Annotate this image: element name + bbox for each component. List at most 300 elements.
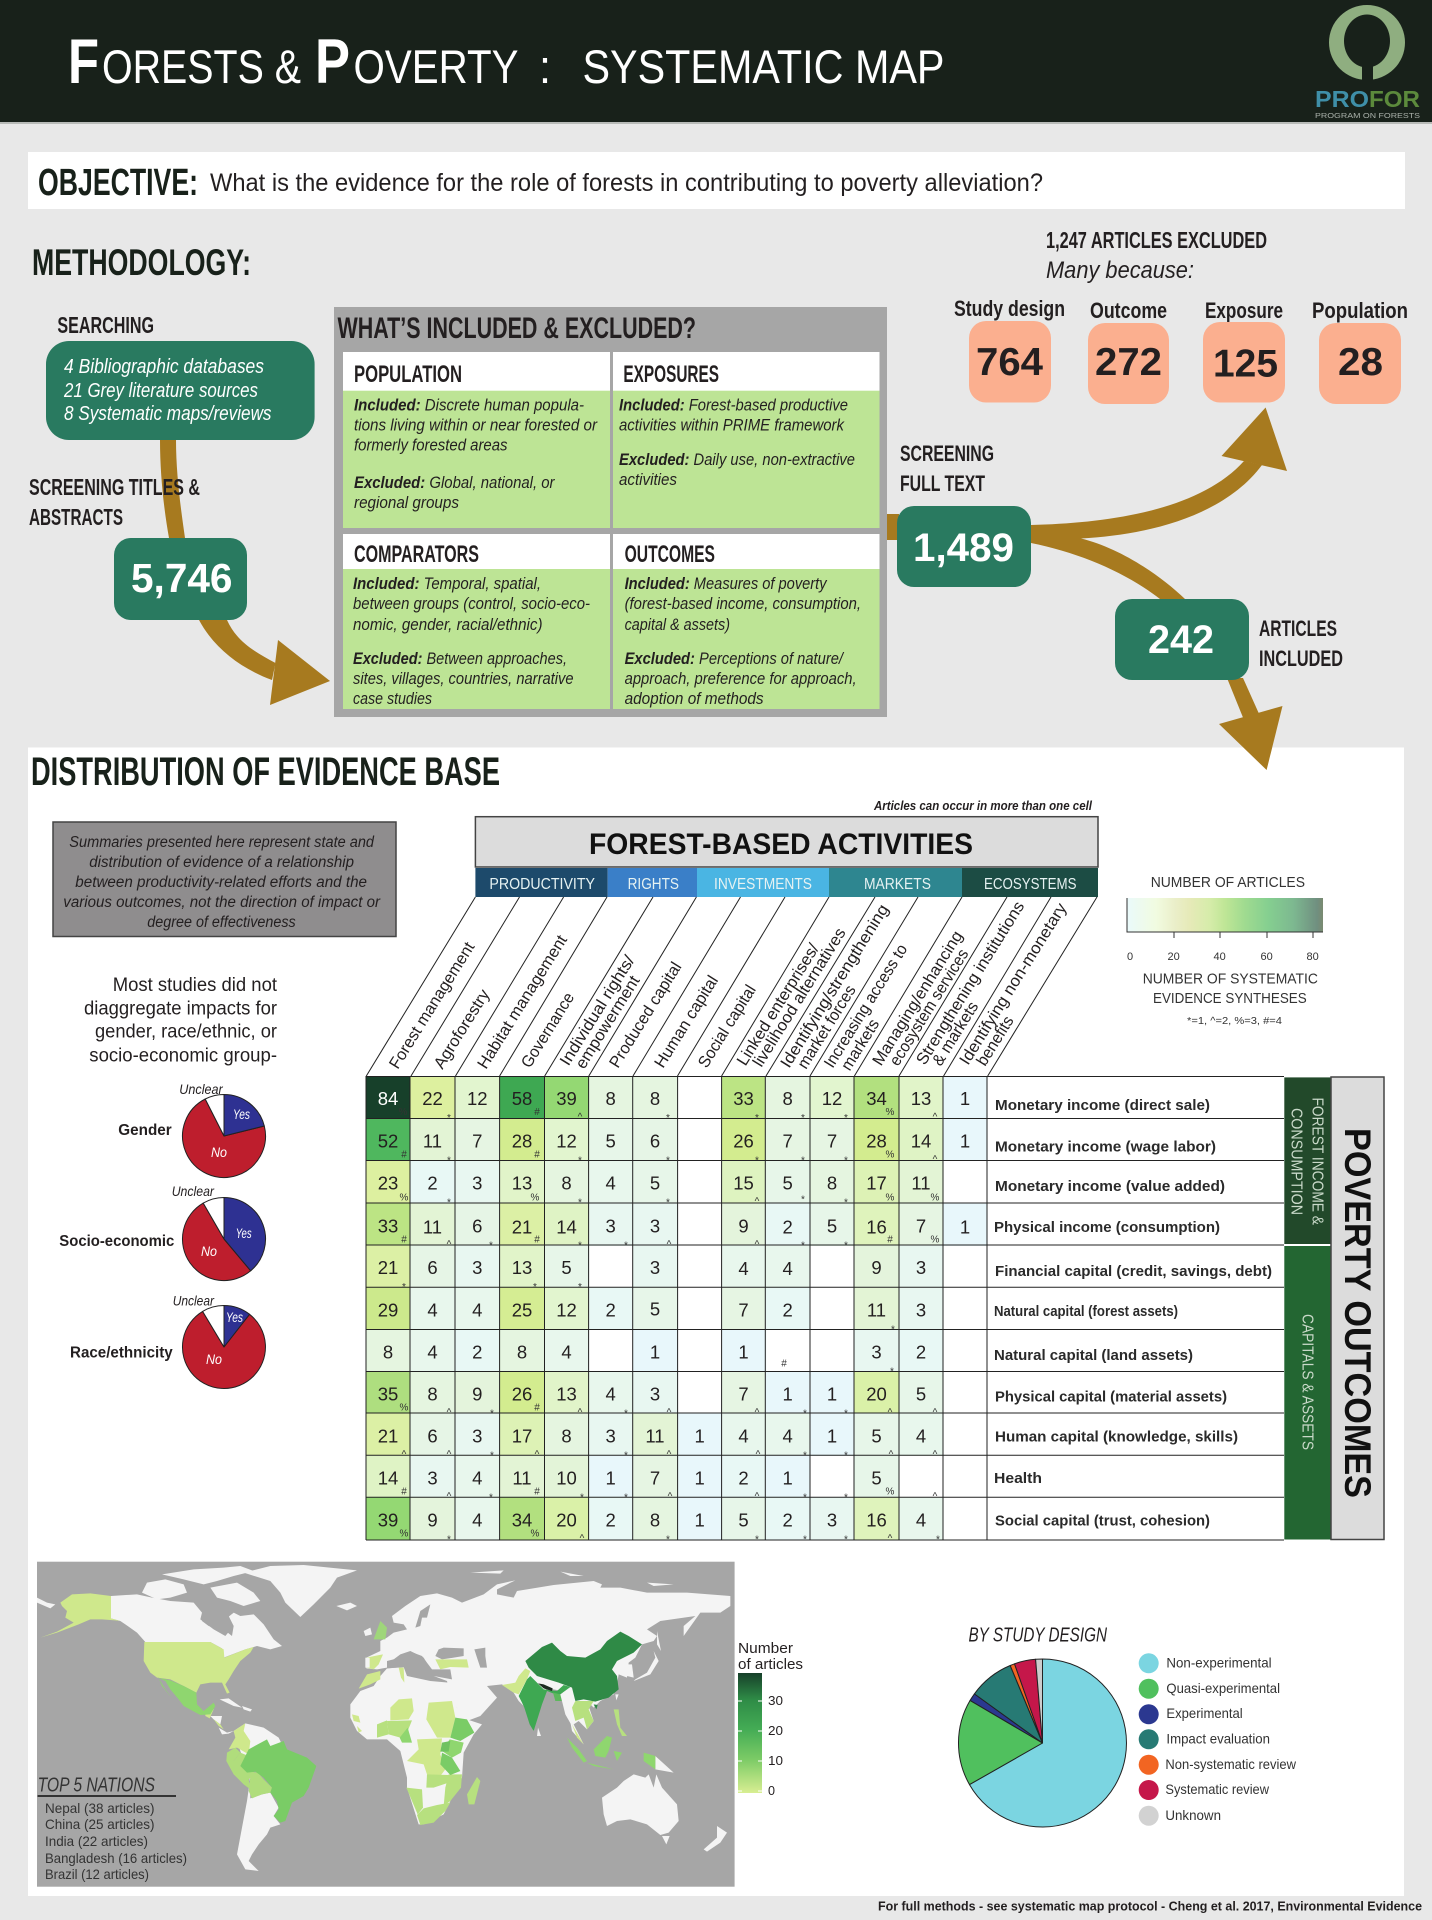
heatmap numbers: row 3: 5 <box>650 1172 660 1193</box>
legend: study design: Systematic review <box>1165 1781 1270 1797</box>
heatmap numbers: row 3: 8 <box>561 1172 572 1193</box>
objective bar: What is the evidence for the role of forests in contributing to poverty alleviation? <box>210 169 1043 197</box>
band: rights <box>608 868 697 897</box>
objective bar: OBJECTIVE: <box>38 162 198 204</box>
heatmap numbers: row 4: ^ <box>755 1239 760 1250</box>
column labels: livelihood alternatives <box>750 925 850 1070</box>
legend: number of articles: 80 <box>1306 951 1319 963</box>
heatmap numbers: row 1: # <box>534 1107 540 1118</box>
heatmap numbers: row 7: * <box>890 1366 894 1377</box>
heatmap numbers: row 8 <box>378 1383 938 1419</box>
pie chart: socio-economic <box>59 1183 266 1281</box>
heatmap numbers: row 9: ^ <box>889 1449 894 1460</box>
heatmap numbers: row 1: 84 <box>378 1088 398 1109</box>
heatmap numbers: row 3: 2 <box>427 1172 438 1193</box>
heatmap numbers: row 9: ^ <box>756 1449 761 1460</box>
arrow: branches from full text screening <box>887 408 1287 770</box>
heatmap numbers: row 10: * <box>803 1492 807 1503</box>
heatmap numbers: row 10: 10 <box>556 1467 577 1488</box>
heatmap numbers: row 6: 3 <box>916 1299 926 1320</box>
heatmap numbers: row 10: ^ <box>933 1491 938 1502</box>
heatmap numbers: row 1: 22 <box>422 1088 443 1109</box>
heatmap numbers: row 11: 34 <box>512 1509 532 1530</box>
heatmap numbers: row 7: 1 <box>738 1341 749 1362</box>
heatmap numbers: row 11: 1 <box>694 1509 705 1530</box>
legend: map number of articles: 20 <box>768 1723 783 1738</box>
cell: outcomes: adoption of methods <box>625 689 764 708</box>
callout: summaries note: various outcomes, not the direction of impact or <box>63 894 381 911</box>
title: OVERTY <box>354 40 518 93</box>
exclusion: study design: 764 <box>976 341 1043 384</box>
heatmap numbers: row 10: 11 <box>512 1467 532 1488</box>
heatmap numbers: row 8: 3 <box>650 1383 660 1404</box>
heatmap numbers: row 1: 39 <box>556 1088 577 1109</box>
column labels: & markets <box>929 999 982 1069</box>
count box: 242 <box>1115 599 1249 680</box>
heatmap numbers: row 11: 20 <box>556 1509 577 1530</box>
heatmap numbers: row 11: 3 <box>827 1509 837 1530</box>
heatmap numbers: row 8: 35 <box>378 1383 398 1404</box>
legend: study design: Unknown <box>1165 1807 1221 1823</box>
column labels: Habitat management <box>474 932 571 1072</box>
heatmap numbers: row 9: ^ <box>535 1449 540 1460</box>
legend: number of articles: NUMBER OF ARTICLES <box>1151 874 1305 891</box>
heatmap numbers: row 9: 1 <box>827 1425 837 1446</box>
heatmap numbers: row 10 <box>378 1467 938 1503</box>
heatmap numbers: row 10: 1 <box>782 1467 793 1488</box>
title: P <box>315 27 350 97</box>
heatmap numbers: row 8: ^ <box>447 1407 452 1418</box>
heatmap numbers: row 8: * <box>490 1408 494 1419</box>
heatmap numbers: row 2: 14 <box>911 1130 931 1151</box>
title <box>68 27 944 97</box>
pie chart: socio-economic: Socio-economic <box>59 1233 174 1250</box>
heatmap numbers: row 10: % <box>886 1486 895 1497</box>
heatmap numbers: row 5: * <box>578 1282 582 1293</box>
heatmap numbers: row 6: 11 <box>867 1299 886 1320</box>
heatmap numbers: row 8: 20 <box>866 1383 887 1404</box>
heading box: forest-based activities: FOREST-BASED ACTIVITIES <box>589 828 973 861</box>
heatmap numbers: row 11: * <box>844 1534 848 1545</box>
heatmap numbers: row 9: 1 <box>694 1425 705 1446</box>
heatmap numbers: row 9: 17 <box>512 1425 532 1446</box>
pie chart: race/ethnicity: Yes <box>226 1309 243 1325</box>
heading box: poverty outcomes <box>1331 1077 1384 1540</box>
row labels: poverty outcomes: Monetary income (direct sale) <box>995 1097 1210 1114</box>
panel: distribution of evidence base <box>28 748 1404 1896</box>
cell: exposures: Included: Forest-based productive <box>619 396 848 415</box>
count box: 5,746: 5,746 <box>131 555 232 601</box>
heatmap numbers: row 8: ^ <box>888 1407 893 1418</box>
heatmap numbers: row 1: 8 <box>605 1088 616 1109</box>
heatmap numbers: row 9: ^ <box>667 1449 672 1460</box>
heatmap numbers: row 11: 4 <box>472 1509 482 1530</box>
exclusion: study design <box>954 296 1065 402</box>
list: top 5 nations: India (22 articles) <box>45 1833 148 1849</box>
heatmap numbers: row 4: * <box>489 1240 493 1251</box>
heatmap numbers: row 8: * <box>844 1408 848 1419</box>
heatmap numbers: row 2: # <box>401 1149 407 1160</box>
cell: exposures: activities within PRIME framework <box>619 416 845 435</box>
heatmap numbers: row 5: * <box>402 1282 406 1293</box>
heatmap numbers: row 9: 11 <box>645 1425 665 1446</box>
heatmap numbers: row 2: 11 <box>423 1130 442 1151</box>
heatmap numbers: row 4: # <box>401 1234 407 1245</box>
row labels: poverty outcomes: Physical capital (material assets) <box>995 1388 1227 1406</box>
heatmap numbers: row 4: ^ <box>667 1239 672 1250</box>
heatmap numbers: row 4: * <box>844 1240 848 1251</box>
heatmap numbers: row 8: 13 <box>556 1383 577 1404</box>
heatmap numbers: row 10: 1 <box>694 1467 705 1488</box>
heatmap numbers: row 6: 12 <box>556 1299 577 1320</box>
legend: number of articles: 20 <box>1168 951 1180 963</box>
cell: comparators: COMPARATORS <box>354 541 479 568</box>
articles included label <box>1259 616 1343 671</box>
heatmap numbers: row 6: 2 <box>782 1299 793 1320</box>
heatmap numbers: row 1: % <box>399 1107 408 1118</box>
screening titles label: ABSTRACTS <box>29 504 123 530</box>
exclusion: outcome: 272 <box>1095 341 1162 384</box>
heatmap numbers: row 2: 7 <box>472 1130 482 1151</box>
list: top 5 nations <box>38 1775 187 1882</box>
heatmap numbers: row 2 <box>378 1130 970 1166</box>
heatmap numbers: row 3: 13 <box>512 1172 532 1193</box>
heatmap numbers: row 4: 3 <box>650 1215 660 1236</box>
cell: population: regional groups <box>354 493 459 512</box>
pie chart: socio-economic: No <box>201 1243 217 1259</box>
callout: summaries note: Summaries presented here represent state and <box>69 834 375 851</box>
screening full text label: FULL TEXT <box>900 471 985 496</box>
heatmap numbers: row 9: * <box>803 1450 807 1461</box>
heatmap numbers: row 2: 7 <box>827 1130 837 1151</box>
heatmap numbers: row 7: 2 <box>472 1341 482 1362</box>
band: markets <box>829 868 962 897</box>
heatmap numbers: row 8: 8 <box>427 1383 438 1404</box>
column labels: Individual rights/ <box>557 952 639 1069</box>
column labels: benefits <box>973 1013 1018 1069</box>
cell: comparators: nomic, gender, racial/ethnic) <box>353 615 542 634</box>
heatmap numbers: row 4: 6 <box>472 1215 482 1236</box>
legend: number of articles: 0 <box>1127 951 1133 963</box>
cell: outcomes: (forest-based income, consumption, <box>625 594 861 613</box>
cell: population: POPULATION <box>354 361 462 388</box>
heatmap numbers: row 9: 5 <box>871 1425 882 1446</box>
heatmap numbers: row 6: 25 <box>512 1299 532 1320</box>
heatmap numbers: row 1: 12 <box>467 1088 488 1109</box>
heatmap numbers: row 4: 11 <box>423 1216 442 1237</box>
row labels: poverty outcomes: Health <box>994 1470 1042 1487</box>
heatmap numbers: row 2: * <box>447 1155 451 1166</box>
diagonal column dividers <box>366 897 1097 1076</box>
heatmap numbers: row 1 <box>378 1088 970 1124</box>
arrow: screening to inclusion criteria <box>199 620 330 705</box>
heatmap numbers: row 2: 26 <box>733 1130 754 1151</box>
heatmap numbers: row 8: * <box>624 1408 628 1419</box>
callout: summaries note: between productivity-related efforts and the <box>75 874 367 891</box>
exclusion: exposure: Exposure <box>1205 298 1283 323</box>
column labels: Governance <box>518 989 578 1071</box>
list: top 5 nations: Nepal (38 articles) <box>45 1800 154 1816</box>
cell: population: Included: Discrete human popula- <box>354 396 584 415</box>
exclusion: outcome <box>1088 298 1169 404</box>
legend: study design: Non-experimental <box>1166 1655 1272 1671</box>
cell: exposures <box>613 352 880 528</box>
heatmap numbers: row 4: * <box>801 1240 805 1251</box>
heatmap numbers: row 8: 4 <box>605 1383 616 1404</box>
list: top 5 nations: China (25 articles) <box>45 1816 154 1832</box>
pie chart: gender: Yes <box>233 1106 250 1122</box>
heatmap numbers: row 9: * <box>490 1450 494 1461</box>
heatmap numbers: row 2: * <box>844 1155 848 1166</box>
legend: map number of articles: 30 <box>768 1693 783 1708</box>
legend: map number of articles: Number <box>738 1640 793 1657</box>
heatmap numbers: row 10: # <box>534 1486 540 1497</box>
exclusion: study design: Study design <box>954 296 1065 321</box>
world map <box>37 1562 735 1887</box>
cell: outcomes: OUTCOMES <box>625 541 715 568</box>
callout: summaries note: distribution of evidence of a relationship <box>89 854 354 871</box>
callout: summaries note <box>53 822 396 936</box>
band: rights: RIGHTS <box>628 876 679 893</box>
band: productivity: PRODUCTIVITY <box>489 876 595 893</box>
band: forest income and consumption <box>1284 1077 1331 1244</box>
heatmap numbers: row 4: 16 <box>866 1216 887 1237</box>
legend: number of articles: EVIDENCE SYNTHESES <box>1153 990 1307 1007</box>
icon: PROFOR logo <box>1315 5 1420 120</box>
legend: number of articles: 40 <box>1214 951 1226 963</box>
band: investments: INVESTMENTS <box>714 876 812 893</box>
cell: comparators: Excluded: Between approaches, <box>353 649 567 668</box>
heatmap numbers: row 1: * <box>447 1113 451 1124</box>
legend: number of articles: *=1, ^=2, %=3, #=4 <box>1187 1016 1282 1027</box>
band: forest income and consumption: CONSUMPTION <box>1288 1108 1305 1215</box>
heatmap numbers: row 5: 21 <box>378 1257 398 1278</box>
heatmap numbers: row 1: 1 <box>960 1088 970 1109</box>
cell: population: formerly forested areas <box>354 436 508 455</box>
heatmap numbers: row 5: 4 <box>782 1258 793 1279</box>
legend: number of articles: NUMBER OF SYSTEMATIC <box>1143 971 1318 988</box>
heatmap numbers: row 5: 9 <box>871 1257 882 1278</box>
heatmap numbers: row 3: 4 <box>605 1172 616 1193</box>
heatmap numbers: row 8: ^ <box>933 1407 938 1418</box>
heatmap numbers: row 1: 13 <box>911 1088 931 1109</box>
heatmap numbers: row 9: ^ <box>402 1449 407 1460</box>
heatmap numbers: row 7: 2 <box>916 1341 926 1362</box>
screening titles label: SCREENING TITLES & <box>29 474 200 500</box>
heatmap numbers: row 10: * <box>844 1492 848 1503</box>
heatmap numbers: row 8: 1 <box>827 1383 837 1404</box>
exclusion: population: 28 <box>1338 341 1383 384</box>
heatmap numbers: row 10: 2 <box>738 1467 749 1488</box>
heatmap numbers: row 11: * <box>803 1534 807 1545</box>
heatmap numbers: row 1: 58 <box>512 1088 532 1109</box>
heatmap numbers: row 5: 13 <box>512 1257 532 1278</box>
count box: 1,489: 1,489 <box>913 526 1014 570</box>
heatmap numbers: row 3: 5 <box>782 1172 793 1193</box>
heatmap numbers: row 4: % <box>931 1234 940 1245</box>
heatmap numbers: row 3: 15 <box>733 1172 754 1193</box>
column labels: Strengthening institutions <box>913 898 1028 1068</box>
cell: exposures: EXPOSURES <box>623 361 719 388</box>
column labels: Identifying/strengthening <box>777 901 893 1071</box>
callout: summaries note: degree of effectiveness <box>147 914 296 931</box>
legend: map number of articles <box>738 1640 803 1798</box>
heatmap numbers: row 11: ^ <box>580 1533 585 1544</box>
searching box: 21 Grey literature sources <box>63 380 258 402</box>
heatmap numbers: row 3: * <box>844 1197 848 1208</box>
cell: outcomes: capital & assets) <box>625 615 730 634</box>
heatmap numbers: row 3: 11 <box>911 1172 931 1193</box>
heatmap numbers: row 2: * <box>801 1155 805 1166</box>
heatmap numbers: row 2: 6 <box>650 1130 660 1151</box>
heatmap numbers: row 2: 52 <box>378 1130 398 1151</box>
pie chart: gender: No <box>211 1144 227 1160</box>
heatmap numbers: row 9 <box>378 1425 938 1461</box>
heatmap numbers: row 1: 34 <box>866 1088 887 1109</box>
pie chart: socio-economic: Yes <box>236 1225 252 1241</box>
heatmap numbers: row 1: 8 <box>650 1088 660 1109</box>
heatmap numbers: row 10: 14 <box>378 1467 398 1488</box>
searching box: 4 Bibliographic databases <box>64 356 264 378</box>
heatmap numbers: row 4: 33 <box>378 1215 398 1236</box>
pie chart: race/ethnicity: Race/ethnicity <box>70 1344 173 1362</box>
heading box: forest-based activities <box>475 817 1098 867</box>
column labels: Social capital <box>695 982 760 1071</box>
exclusion: population <box>1312 298 1408 404</box>
legend: number of articles <box>1127 874 1323 1027</box>
heatmap numbers: row 11 <box>378 1509 940 1545</box>
list: top 5 nations: Bangladesh (16 articles) <box>45 1850 187 1866</box>
heatmap numbers: row 11: 2 <box>605 1509 616 1530</box>
column labels: Produced capital <box>606 959 685 1071</box>
heatmap numbers: row 11: * <box>755 1534 759 1545</box>
exclusion: population: Population <box>1312 298 1408 323</box>
heatmap numbers: row 1: 8 <box>782 1088 793 1109</box>
text: disaggregation note <box>84 975 278 1067</box>
heatmap numbers: row 3: 8 <box>827 1172 837 1193</box>
heatmap numbers: row 9: ^ <box>447 1449 452 1460</box>
heatmap numbers: row 8: ^ <box>755 1407 760 1418</box>
heatmap numbers: row 9: 3 <box>605 1425 616 1446</box>
legend: study design <box>1139 1653 1297 1826</box>
searching box <box>46 341 315 440</box>
heatmap numbers: row 10: # <box>401 1486 407 1497</box>
screening full text label: SCREENING <box>900 441 994 466</box>
row labels: poverty outcomes <box>994 1097 1272 1530</box>
heatmap numbers: row 5: 5 <box>561 1257 572 1278</box>
pie chart: study design <box>958 1659 1126 1827</box>
pie chart: race/ethnicity: No <box>206 1351 222 1367</box>
heatmap numbers: row 8: 5 <box>916 1383 926 1404</box>
column labels: ecosystem services <box>886 946 972 1069</box>
heatmap numbers: row 10: 7 <box>650 1467 660 1488</box>
row labels: poverty outcomes: Human capital (knowledge, skills) <box>995 1429 1238 1446</box>
list: top 5 nations: Brazil (12 articles) <box>45 1866 149 1882</box>
heatmap numbers: row 4: 2 <box>782 1216 793 1237</box>
pie chart: socio-economic: Unclear <box>172 1183 215 1199</box>
heatmap numbers: row 3: * <box>801 1194 805 1205</box>
row labels: poverty outcomes: Financial capital (credit, savings, debt) <box>995 1263 1272 1280</box>
text: disaggregation note: Most studies did not <box>113 975 278 996</box>
heatmap numbers: row 2: 28 <box>512 1130 532 1151</box>
heatmap numbers: row 7: 3 <box>871 1341 882 1362</box>
band: productivity <box>475 868 608 897</box>
heatmap numbers: row 8: 1 <box>782 1383 793 1404</box>
heatmap numbers: row 11: 2 <box>782 1509 793 1530</box>
legend: map number of articles: 0 <box>768 1783 775 1798</box>
heatmap numbers: row 2: ^ <box>933 1154 938 1165</box>
heatmap numbers: row 6: 4 <box>427 1299 438 1320</box>
panel: what's included and excluded <box>334 307 887 717</box>
heatmap numbers: row 1: * <box>801 1113 805 1124</box>
column labels: Identifying non-monetary <box>956 899 1071 1068</box>
heatmap numbers: row 11: 16 <box>866 1509 887 1530</box>
excluded heading: Many because: <box>1046 257 1194 284</box>
title: : <box>539 40 551 93</box>
heatmap numbers: row 3: 3 <box>472 1172 482 1193</box>
heatmap numbers: row 2: 1 <box>960 1130 970 1151</box>
heatmap numbers: row 1: 33 <box>733 1088 754 1109</box>
heatmap numbers: row 6: 7 <box>738 1299 749 1320</box>
heatmap numbers: row 3: 17 <box>866 1172 887 1193</box>
heatmap numbers: row 11: 9 <box>427 1509 438 1530</box>
heatmap numbers: row 2: 7 <box>782 1130 793 1151</box>
heatmap numbers: row 1: % <box>886 1107 895 1118</box>
cell: comparators <box>343 534 610 709</box>
heatmap numbers: row 6 <box>378 1298 926 1335</box>
column labels: empowerment <box>572 972 644 1072</box>
heatmap numbers: row 7 <box>383 1341 926 1377</box>
heatmap numbers: row 11: % <box>531 1528 540 1539</box>
heading box: poverty outcomes: POVERTY OUTCOMES <box>1337 1128 1378 1498</box>
legend: number of articles: 60 <box>1260 951 1273 963</box>
band: forest income and consumption: FOREST INCOME & <box>1309 1098 1326 1225</box>
searching box: 8 Systematic maps/reviews <box>64 403 272 425</box>
heatmap numbers: row 2: * <box>755 1155 759 1166</box>
heatmap numbers: row 2: % <box>886 1149 895 1160</box>
excluded heading <box>1046 227 1267 284</box>
heatmap numbers: row 4: * <box>578 1240 582 1251</box>
heatmap numbers: row 8: 9 <box>472 1383 482 1404</box>
heatmap numbers: row 3 <box>378 1172 940 1208</box>
heatmap numbers: row 1: * <box>755 1113 759 1124</box>
heatmap numbers: row 10: ^ <box>755 1491 760 1502</box>
heatmap numbers: row 11: 8 <box>650 1509 660 1530</box>
cell: comparators: case studies <box>353 689 432 708</box>
arrow: searching to screening <box>160 440 185 538</box>
heatmap numbers: row 8: % <box>400 1402 409 1413</box>
heatmap numbers: row 10: 4 <box>472 1467 482 1488</box>
heatmap numbers: row 9: 3 <box>472 1425 482 1446</box>
column labels: Increasing access to <box>821 941 911 1071</box>
heatmap numbers: row 3: % <box>400 1192 409 1203</box>
screening full text label <box>900 441 994 496</box>
heatmap numbers: row 11: * <box>447 1534 451 1545</box>
text: disaggregation note: gender, race/ethnic, or <box>95 1022 278 1042</box>
heatmap numbers: row 10: 3 <box>427 1467 438 1488</box>
heatmap numbers: row 4: 1 <box>960 1216 970 1237</box>
heatmap numbers: row 9: * <box>624 1450 628 1461</box>
heatmap grid lines <box>366 1076 1284 1540</box>
note: articles in multiple cells: Articles can occur in more than one cell <box>873 798 1092 813</box>
icon: PROFOR logo: PROGRAM ON FORESTS <box>1315 111 1420 120</box>
text: disaggregation note: diaggregate impacts for <box>84 999 278 1020</box>
heatmap numbers: row 10: * <box>580 1492 584 1503</box>
band: ecosystems <box>962 868 1098 897</box>
heatmap numbers: row 9: 4 <box>738 1425 749 1446</box>
excluded heading: 1,247 ARTICLES EXCLUDED <box>1046 227 1267 253</box>
heatmap numbers: row 9: ^ <box>933 1449 938 1460</box>
